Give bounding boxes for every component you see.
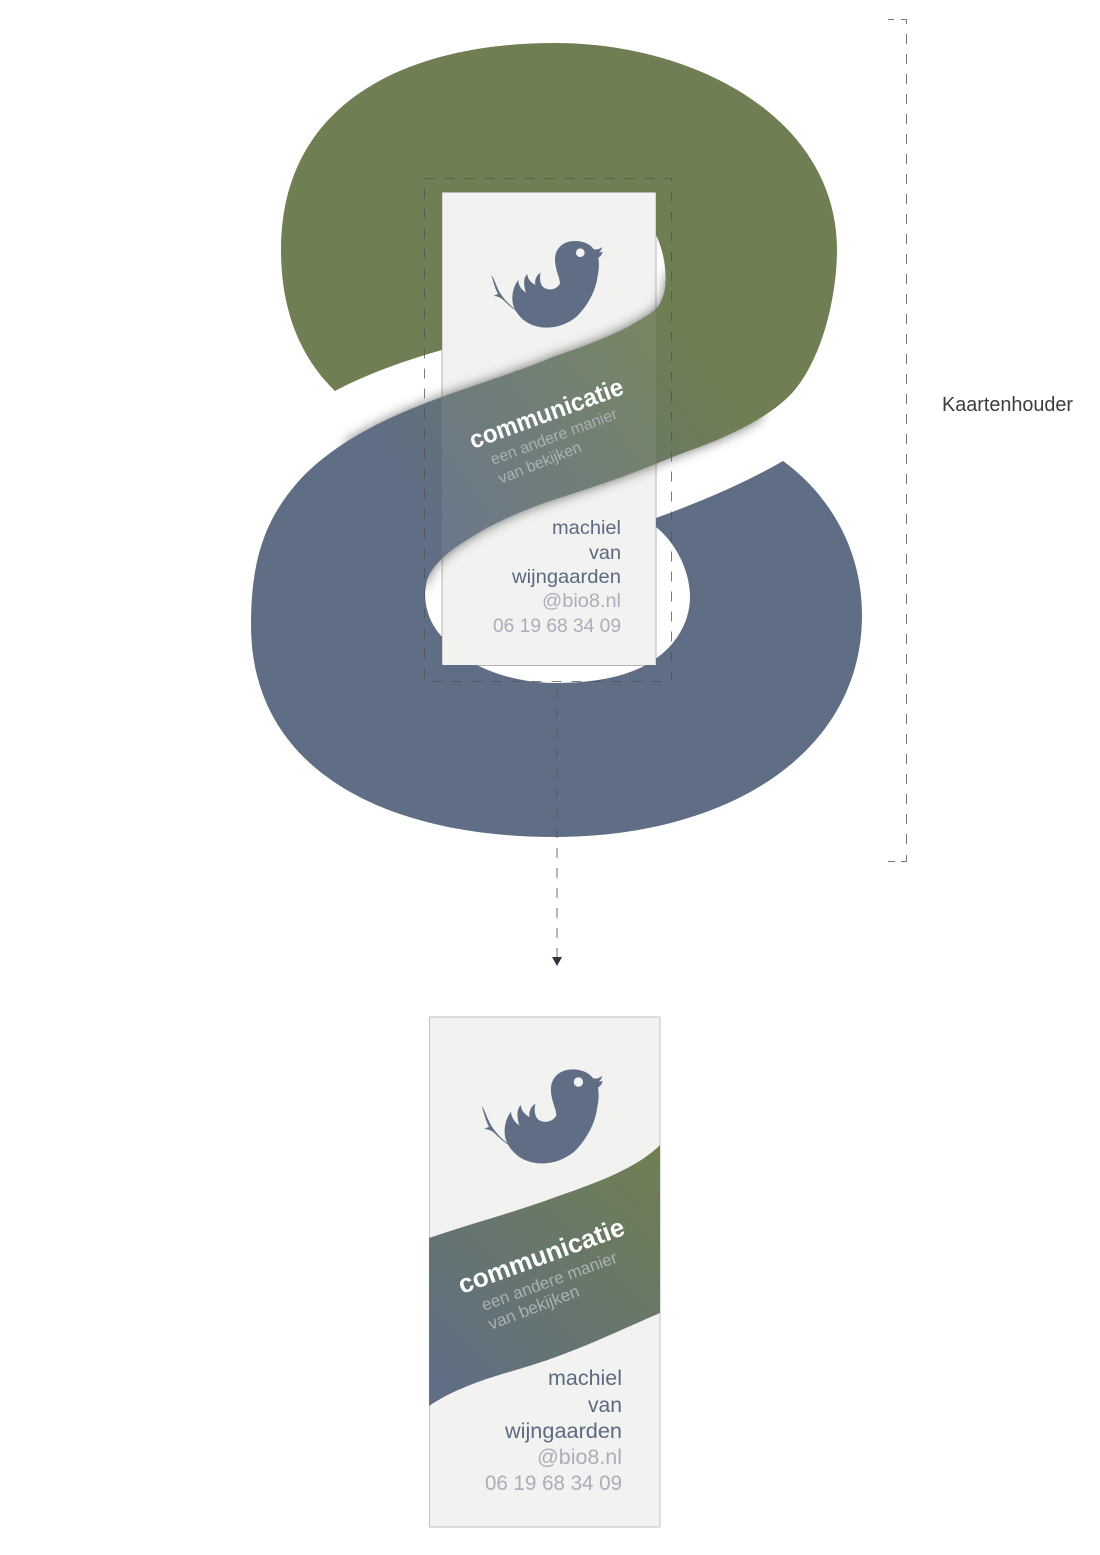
band shadow xyxy=(345,270,765,592)
bottom lobe xyxy=(251,461,862,837)
contact details: van xyxy=(589,542,621,564)
band on card xyxy=(429,1145,660,1406)
arrow to card detail xyxy=(552,688,562,966)
contact details on card: machiel xyxy=(548,1367,622,1390)
contact details: wijngaarden xyxy=(511,566,621,588)
contact details: machiel xyxy=(552,517,621,539)
band text xyxy=(465,373,627,488)
top lobe xyxy=(281,43,837,391)
contact details on card: van xyxy=(588,1394,622,1417)
icon: bird logo large xyxy=(482,1069,603,1163)
band text on card: een andere manier xyxy=(479,1248,620,1315)
contact details on card: wijngaarden xyxy=(504,1420,622,1443)
label: Kaartenhouder: Kaartenhouder xyxy=(942,394,1073,416)
contact details on card xyxy=(485,1367,622,1495)
dashed card outline xyxy=(424,178,672,682)
contact details on card: @bio8.nl xyxy=(537,1446,622,1469)
band text on card: communicatie xyxy=(454,1212,628,1300)
figure: card holder shaped as an 8 xyxy=(251,43,862,837)
diagonal band xyxy=(251,250,837,660)
band text: van bekijken xyxy=(496,439,584,488)
contact details: @bio8.nl xyxy=(542,590,621,612)
band text: een andere manier xyxy=(488,406,621,469)
contact details: 06 19 68 34 09 xyxy=(493,615,621,637)
icon: bird logo xyxy=(491,241,603,328)
contact details on card: 06 19 68 34 09 xyxy=(485,1472,622,1495)
band text on card: van bekijken xyxy=(486,1282,582,1334)
card in holder xyxy=(442,192,656,666)
contact details xyxy=(493,517,621,637)
band lightening over card xyxy=(442,310,656,558)
dimension bracket xyxy=(888,20,906,862)
business card detail xyxy=(429,1017,660,1527)
band text: communicatie xyxy=(465,373,627,455)
